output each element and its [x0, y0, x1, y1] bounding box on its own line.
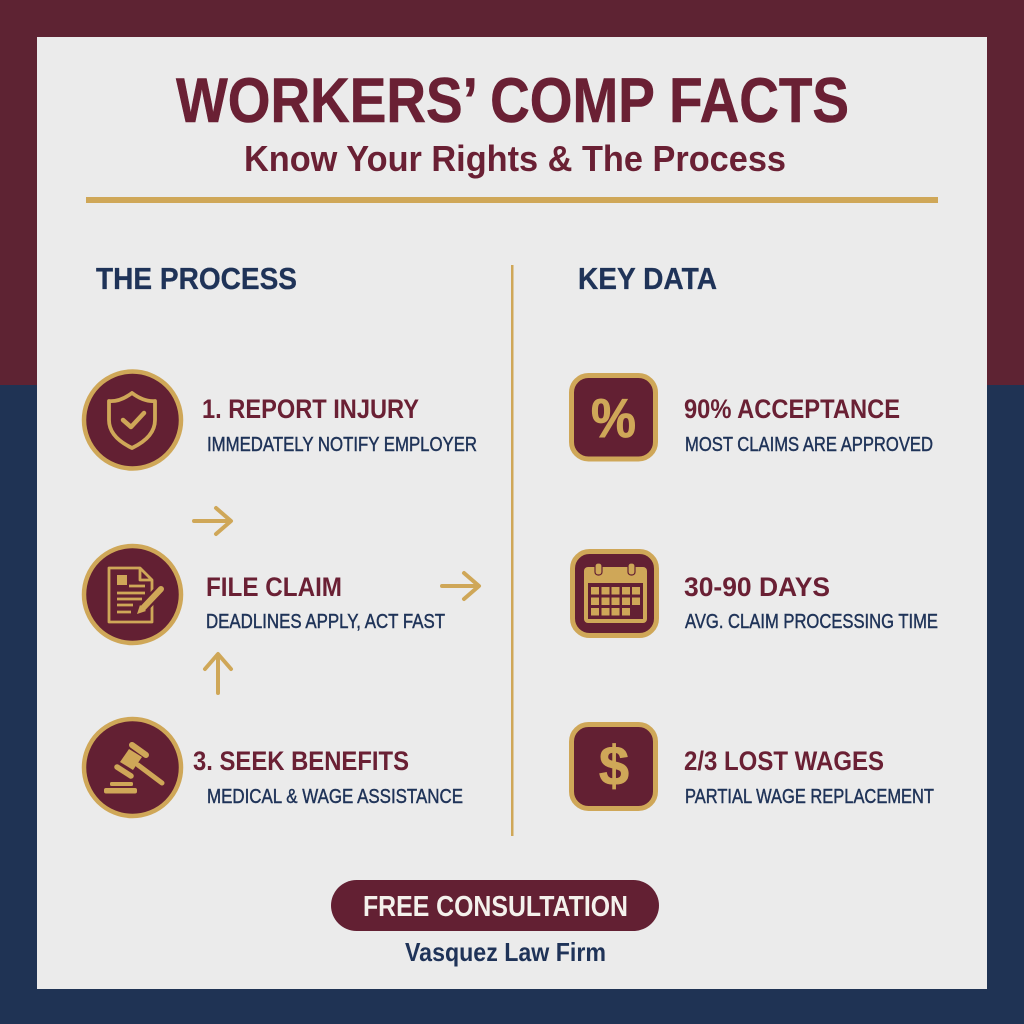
button: free consultation: FREE CONSULTATION	[363, 891, 628, 923]
gold title rule	[86, 197, 938, 203]
step 1 heading: 1. REPORT INJURY	[202, 394, 419, 424]
icon: dollar	[572, 724, 656, 808]
step 1 description: IMMEDATELY NOTIFY EMPLOYER	[207, 434, 477, 456]
icon: percent	[572, 376, 656, 459]
icon: document and pen	[84, 546, 181, 643]
step 2 description: DEADLINES APPLY, ACT FAST	[206, 611, 445, 633]
icon: calendar	[572, 552, 656, 636]
arrow: right, toward key data	[442, 573, 479, 599]
heading: key data: KEY DATA	[578, 261, 717, 296]
step 3: seek benefits	[84, 719, 463, 816]
background: maroon top band	[0, 0, 1024, 385]
arrow: up, between steps 3 and 2	[205, 654, 231, 693]
acceptance heading: 90% ACCEPTANCE	[684, 394, 900, 424]
title: WORKERS’ COMP FACTS	[176, 66, 849, 136]
acceptance description: MOST CLAIMS ARE APPROVED	[685, 434, 933, 456]
step 3 description: MEDICAL & WAGE ASSISTANCE	[207, 786, 463, 808]
step 2 heading: FILE CLAIM	[206, 572, 342, 602]
data item: processing time	[572, 552, 938, 636]
data item: acceptance	[572, 376, 933, 459]
icon: shield	[84, 372, 181, 468]
data item: lost wages	[572, 724, 934, 808]
step 1: report injury	[84, 372, 477, 468]
firm name: Vasquez Law Firm	[405, 937, 606, 967]
processing time description: AVG. CLAIM PROCESSING TIME	[685, 611, 938, 633]
column divider	[511, 265, 514, 836]
icon: dollar: $	[599, 734, 629, 797]
background: navy bottom band	[0, 385, 1024, 1024]
lost wages description: PARTIAL WAGE REPLACEMENT	[685, 786, 934, 808]
lost wages heading: 2/3 LOST WAGES	[684, 746, 884, 776]
subtitle: Know Your Rights & The Process	[244, 138, 786, 179]
arrow: right, between steps 1 and 2	[194, 508, 231, 534]
button: free consultation	[331, 880, 659, 931]
step 2: file claim	[84, 546, 445, 643]
step 3 heading: 3. SEEK BENEFITS	[193, 746, 409, 776]
icon: gavel	[84, 719, 181, 816]
processing time heading: 30-90 DAYS	[684, 572, 830, 602]
icon: percent: %	[591, 387, 636, 449]
heading: the process: THE PROCESS	[96, 261, 297, 296]
